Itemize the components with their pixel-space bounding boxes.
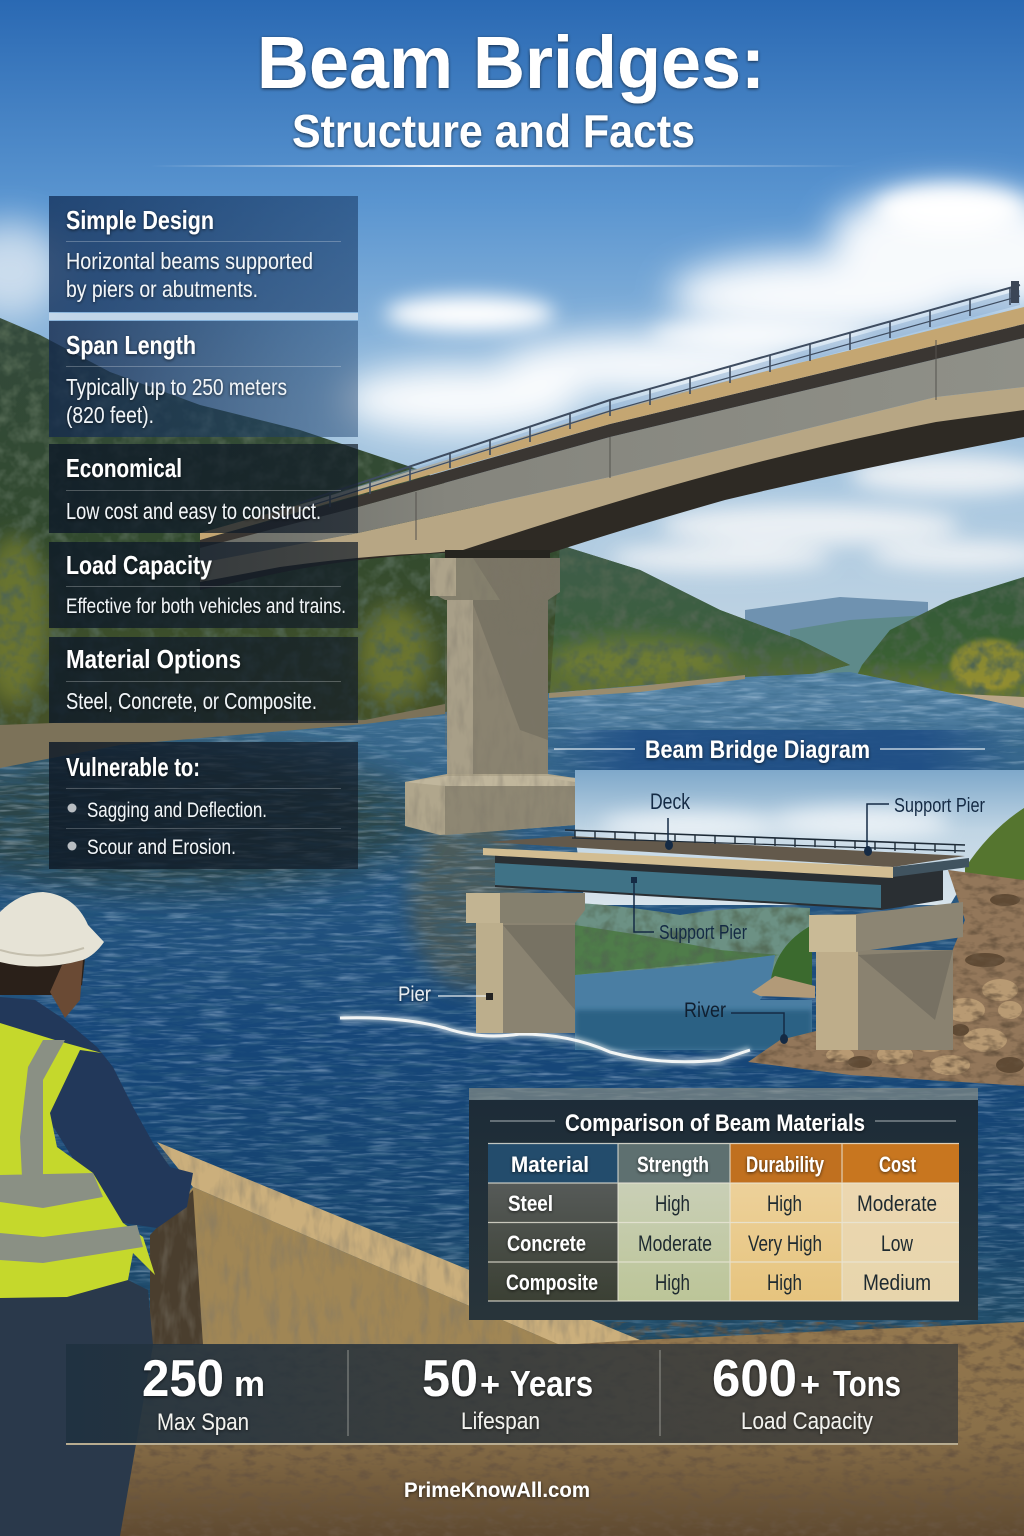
table column: strength: High [655, 1191, 690, 1216]
banner: Beam Bridge Diagram [545, 730, 1015, 770]
label: Deck [650, 789, 691, 850]
steel beam [495, 853, 943, 910]
worker hard hat [0, 892, 104, 967]
label: Pier [398, 983, 493, 1006]
worker [0, 892, 193, 1536]
table header: Cost [879, 1152, 917, 1177]
stat: 50+ years lifespan [422, 1350, 593, 1435]
stat: 50+ years lifespan: + [480, 1366, 500, 1404]
label: Pier: Pier [398, 983, 431, 1006]
stat: 50+ years lifespan: Years [510, 1363, 593, 1404]
label: Deck: Deck [650, 789, 691, 814]
table header: Material [511, 1152, 589, 1177]
wall top [157, 1142, 640, 1345]
title: Beam Bridges: [257, 21, 765, 104]
label: River: River [684, 999, 726, 1022]
body: Economical: Low cost and easy to construct. [66, 498, 321, 524]
centre shoreline [549, 675, 745, 698]
label: Support Pier (middle): Support Pier [659, 922, 747, 944]
table column: strength [618, 1183, 730, 1301]
table column: strength: High [655, 1270, 690, 1295]
stats bar [66, 1344, 958, 1445]
diagram river [575, 955, 812, 1050]
river water [0, 670, 1024, 1345]
wall face [150, 1187, 560, 1345]
panel: Vulnerable to [49, 742, 358, 869]
table header: Durability [746, 1152, 825, 1177]
stat: 250 m max span: m [234, 1363, 265, 1404]
table column: cost: Medium [863, 1270, 931, 1295]
stat: 250 m max span: Max Span [157, 1409, 249, 1436]
bridge web [200, 338, 1024, 563]
stat: 600+ tons load capacity: Load Capacity [741, 1408, 873, 1435]
worker neck and hair [0, 958, 85, 995]
heading: Span Length: Span Length [66, 330, 196, 360]
hill: right bank [858, 577, 1024, 708]
vest reflective stripes [0, 1040, 143, 1263]
table header [488, 1143, 959, 1183]
worker jacket [0, 997, 193, 1228]
bullet: Scour and Erosion: Scour and Erosion. [87, 836, 236, 859]
body: Load Capacity: Effective for both vehicles and trains. [66, 595, 346, 618]
heading: Vulnerable to: Vulnerable to: [66, 752, 200, 782]
worker vest [0, 1023, 155, 1298]
diagram left pier [466, 893, 585, 1033]
label: Support Pier (middle) [631, 877, 747, 944]
body: Material Options: Steel, Concrete, or Composite. [66, 688, 317, 714]
table title: Comparison of Beam Materials [565, 1110, 865, 1137]
label: River [684, 999, 788, 1044]
bridge post at right edge [1011, 281, 1019, 303]
stat: 600+ tons load capacity: Tons [833, 1363, 901, 1404]
table column: durability [730, 1183, 842, 1301]
footer credit: PrimeKnowAll.com [404, 1479, 590, 1502]
heading: Economical: Economical [66, 453, 182, 483]
table column: material names: Steel [508, 1191, 553, 1216]
concrete wall and ground [0, 1142, 1024, 1536]
table column: material names [488, 1183, 618, 1301]
stat: 250 m max span: 250 [142, 1350, 224, 1408]
stat: 600+ tons load capacity: 600 [712, 1350, 797, 1408]
diagram railing [565, 830, 965, 853]
rock embankment [748, 870, 1024, 1086]
table column: durability: High [767, 1270, 802, 1295]
diagram clouds [600, 806, 950, 839]
diagram sky backdrop [575, 770, 1024, 905]
body: Simple Design: Horizontal beams supported [66, 248, 313, 274]
ground [0, 1322, 1024, 1536]
table column: strength: Moderate [638, 1231, 712, 1256]
diagram deck slab [483, 836, 969, 878]
background: clouds [0, 186, 1024, 572]
hills: left and centre [0, 318, 850, 725]
label: Support Pier (top): Support Pier [894, 795, 985, 817]
main pier [400, 550, 580, 840]
table column: material names: Concrete [507, 1231, 586, 1256]
title [257, 21, 765, 157]
stat: 600+ tons load capacity: + [800, 1366, 820, 1404]
table column: durability: Very High [748, 1231, 822, 1256]
stat: 50+ years lifespan: Lifespan [461, 1408, 540, 1435]
banner: Beam Bridge Diagram: Beam Bridge Diagram [645, 736, 870, 764]
subtitle: Structure and Facts [292, 105, 695, 157]
panel: Load Capacity [49, 542, 358, 628]
bridge deck edge [200, 307, 1024, 540]
stat: 250 m max span [142, 1350, 265, 1436]
heading: Load Capacity: Load Capacity [66, 550, 212, 580]
diagram section [340, 730, 1024, 1086]
panel: comparison of beam materials [469, 1088, 978, 1320]
heading: Material Options: Material Options [66, 644, 241, 674]
table header: Strength [637, 1152, 709, 1177]
wave foam [340, 1018, 750, 1062]
table column: cost: Low [881, 1231, 913, 1256]
bridge railing [300, 285, 1020, 510]
table column: material names: Composite [506, 1270, 598, 1295]
body: Simple Design: by piers or abutments. [66, 276, 258, 302]
diagram right hill [965, 808, 1024, 880]
table column: cost: Moderate [857, 1191, 937, 1216]
bullet: Sagging and Deflection: Sagging and Deflection. [87, 799, 267, 822]
table column: durability: High [767, 1191, 802, 1216]
worker jeans [0, 1280, 153, 1536]
bridge underside [200, 405, 1024, 590]
diagram bank hill [770, 925, 812, 990]
diagram right pier [809, 902, 963, 1050]
body: Span Length: Typically up to 250 meters [66, 374, 287, 400]
stat: 50+ years lifespan: 50 [422, 1350, 478, 1408]
heading: Simple Design: Simple Design [66, 205, 214, 235]
distant ridge [745, 597, 928, 680]
diagram valley hills [575, 904, 810, 978]
left shoreline rocks [0, 704, 445, 768]
panel: Span Length [49, 321, 358, 437]
panel: Material Options [49, 637, 358, 723]
background: sky [0, 0, 1024, 720]
body: Span Length: (820 feet). [66, 402, 154, 428]
table column: cost [842, 1183, 959, 1301]
panel: Simple Design [49, 196, 358, 312]
body: Span Length [66, 374, 287, 428]
main bridge deck [200, 281, 1024, 590]
label: Support Pier (top) [864, 795, 985, 856]
body: Simple Design [66, 248, 313, 302]
panel: Economical [49, 444, 358, 533]
bridge soffit flange [200, 387, 1024, 582]
stat: 600+ tons load capacity [712, 1350, 901, 1435]
